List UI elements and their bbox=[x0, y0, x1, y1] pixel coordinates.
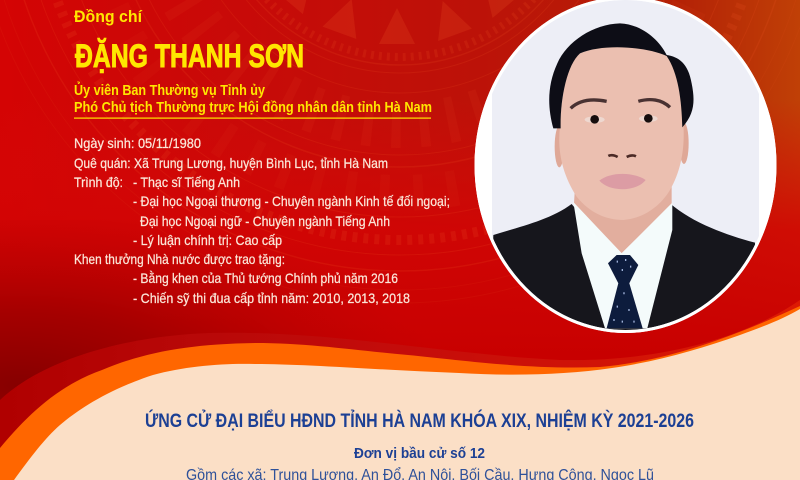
university degree 2: Đại học Ngoại ngữ - Chuyên ngành Tiếng Anh bbox=[140, 213, 390, 229]
tie dots bbox=[613, 260, 635, 322]
photo backdrop bbox=[492, 0, 759, 245]
photo oval border bbox=[476, 0, 775, 332]
wave: inner red band bbox=[0, 300, 800, 480]
jacket bbox=[490, 203, 757, 337]
portrait photo bbox=[474, 0, 776, 337]
awards label: Khen thưởng Nhà nước được trao tặng: bbox=[74, 251, 285, 267]
election heading: ỨNG CỬ ĐẠI BIỂU HĐND TỈNH HÀ NAM KHÓA XIX, NHIỆM KỲ 2021-2026 bbox=[145, 410, 694, 432]
man in suit bbox=[490, 23, 757, 337]
bronze drum pattern bbox=[0, 0, 800, 303]
masters degree: - Thạc sĩ Tiếng Anh bbox=[133, 174, 240, 190]
role underline bbox=[74, 118, 431, 119]
wave: cream panel bbox=[14, 309, 800, 480]
neck bbox=[574, 187, 672, 253]
award 1: - Bằng khen của Thủ tướng Chính phủ năm 2016 bbox=[133, 270, 398, 286]
necktie bbox=[607, 255, 643, 328]
education label: Trình độ: bbox=[74, 174, 123, 190]
award 2: - Chiến sỹ thi đua cấp tỉnh năm: 2010, 2013, 2018 bbox=[133, 290, 410, 306]
ears bbox=[555, 126, 564, 167]
hometown: Quê quán: Xã Trung Lương, huyện Bình Lục, tỉnh Hà Nam bbox=[74, 155, 388, 171]
nose bbox=[608, 155, 636, 157]
role line 1: Ủy viên Ban Thường vụ Tỉnh ủy bbox=[74, 81, 266, 99]
hair bbox=[549, 23, 694, 128]
wave: dark shading at lower left bbox=[0, 220, 600, 480]
political theory: - Lý luận chính trị: Cao cấp bbox=[133, 232, 282, 248]
salutation: Đồng chí bbox=[74, 7, 143, 26]
role line 2: Phó Chủ tịch Thường trực Hội đồng nhân dân tỉnh Hà Nam bbox=[74, 99, 432, 116]
candidate name: ĐẶNG THANH SƠN bbox=[75, 38, 304, 74]
biography details bbox=[74, 135, 450, 306]
date of birth: Ngày sinh: 05/11/1980 bbox=[74, 135, 201, 151]
university degree 1: - Đại học Ngoại thương - Chuyên ngành Kinh tế đối ngoại; bbox=[133, 193, 450, 209]
eyebrows bbox=[571, 100, 670, 108]
header text block bbox=[74, 7, 432, 119]
eyes bbox=[585, 114, 658, 124]
wave: orange band bbox=[0, 306, 800, 480]
shirt bbox=[573, 202, 672, 328]
constituency: Đơn vị bầu cử số 12 bbox=[354, 445, 485, 462]
election text block bbox=[145, 410, 694, 480]
face bbox=[559, 47, 684, 220]
photo oval frame bbox=[474, 0, 776, 333]
lips bbox=[599, 174, 646, 189]
